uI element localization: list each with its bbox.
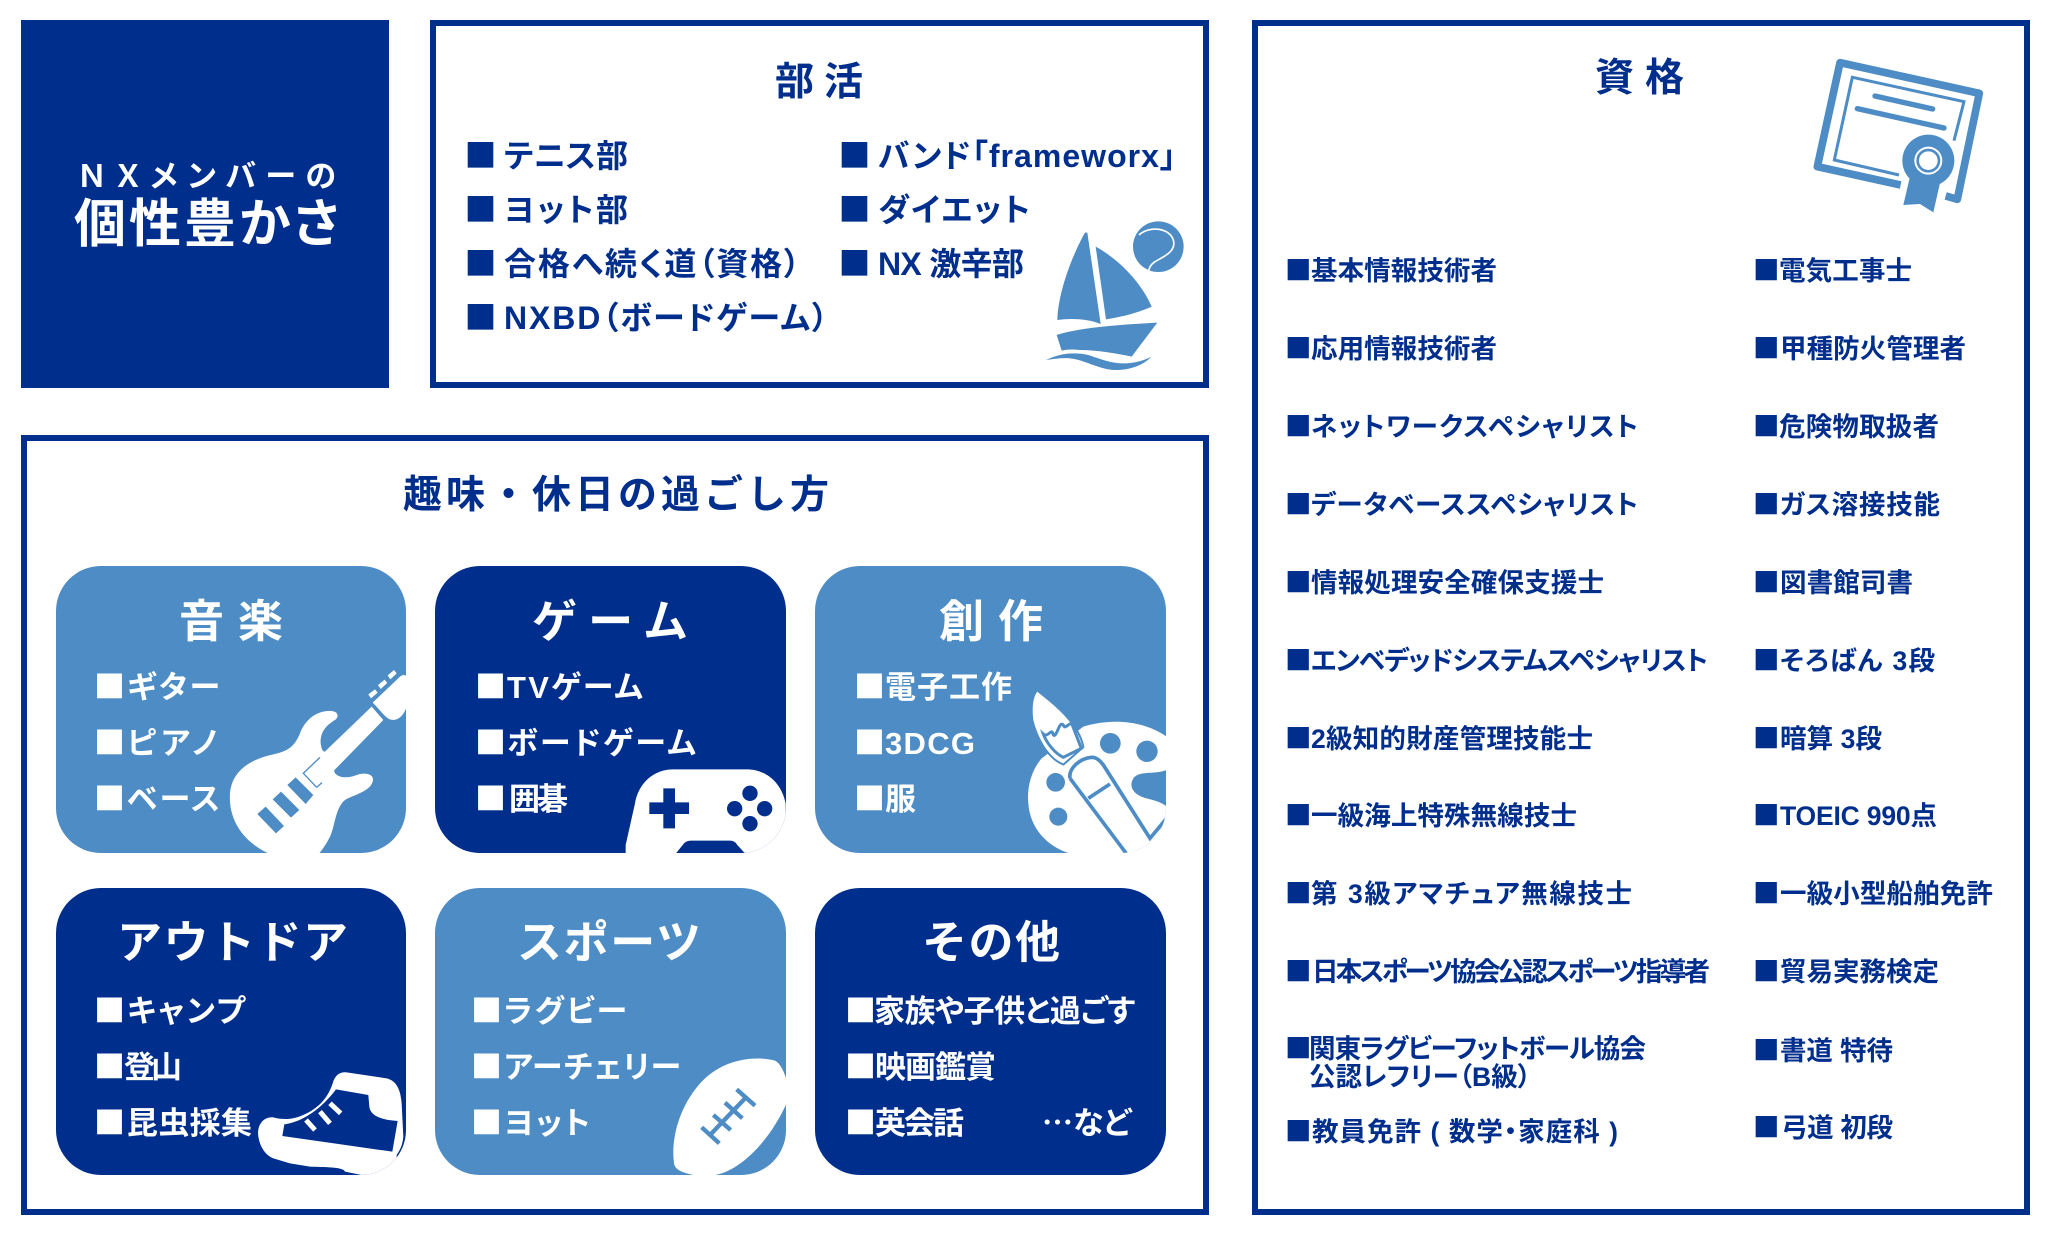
icon: sailboat and tennis ball [1046, 221, 1184, 370]
creation list: ■ [854, 774, 885, 819]
clubs list: ■ [464, 131, 497, 177]
qualifications list: left column: 一級海上特殊無線技士 [1311, 801, 1577, 831]
qualifications list: left column: ■ [1285, 1110, 1312, 1149]
clubs list: ■ [464, 185, 497, 231]
qualifications list: right column: 貿易実務検定 [1780, 957, 1939, 987]
games list: ■ [475, 718, 506, 763]
games list: ■ [475, 774, 506, 819]
other list [845, 986, 1135, 1143]
qualifications list: right column: ■ [1753, 717, 1780, 756]
creation list [854, 662, 1012, 819]
qualifications list: right column: ■ [1753, 1029, 1780, 1068]
clubs list: NX 激辛部 [878, 246, 1024, 282]
qualifications list: left column: ■ [1285, 483, 1312, 522]
qualifications list: left column: 情報処理安全確保支援士 [1311, 568, 1604, 598]
qualifications list: left column: ■ [1285, 405, 1312, 444]
music list: ■ [94, 662, 125, 707]
games heading: ゲーム [532, 596, 688, 647]
icon: palette and brush [1028, 692, 1167, 854]
clubs list: ■ [838, 185, 871, 231]
card: sports [435, 888, 787, 1175]
outdoors list: ■ [94, 986, 125, 1031]
music list: ■ [94, 718, 125, 763]
panel: qualifications [1255, 23, 2027, 1212]
qualifications list: left column: ■ [1285, 1027, 1312, 1066]
qualifications list: left column: 第 3級アマチュア無線技士 [1311, 879, 1632, 909]
hobbies heading: 趣味・休日の過ごし方 [403, 474, 829, 517]
qualifications list: right column: 危険物取扱者 [1779, 412, 1939, 442]
sports heading: スポーツ [517, 917, 701, 968]
games list: ■ [475, 662, 506, 707]
qualifications list: right column: 弓道 初段 [1781, 1113, 1894, 1143]
outdoors list: 登山 [124, 1050, 182, 1085]
card: creation [815, 566, 1167, 854]
games list: 囲碁 [509, 782, 568, 817]
other heading: その他 [922, 917, 1060, 968]
qualifications list: left column: 教員免許 ( 数学・家庭科 ) [1312, 1117, 1618, 1147]
qualifications list: left column: 日本スポーツ協会公認スポーツ指導者 [1312, 957, 1710, 987]
qualifications heading: 資格 [1595, 57, 1684, 100]
title: first line: ＮＸメンバーの [78, 159, 336, 194]
outdoors list [94, 986, 252, 1143]
qualifications list: right column: ■ [1753, 405, 1780, 444]
clubs heading: 部活 [775, 61, 863, 104]
sports list [471, 986, 681, 1143]
music heading: 音楽 [179, 596, 283, 647]
sports list: ■ [471, 1098, 502, 1143]
creation list: 服 [885, 782, 916, 817]
sports list: ■ [471, 986, 502, 1031]
other list: ■ [845, 1042, 876, 1087]
creation heading: 創作 [939, 596, 1043, 647]
qualifications list: right column: ■ [1753, 1106, 1780, 1145]
clubs list: バンド「frameworx」 [878, 138, 1176, 174]
creation list: ■ [854, 718, 885, 763]
icon: rugby ball [673, 1058, 787, 1175]
clubs list: NXBD（ボードゲーム） [504, 300, 828, 336]
qualifications list: right column: ■ [1753, 561, 1780, 600]
icon: game controller [626, 769, 787, 853]
games list [475, 662, 696, 819]
sports list: ラグビー [504, 994, 627, 1029]
qualifications list: left column: ■ [1285, 561, 1312, 600]
music list: ギター [127, 670, 220, 705]
qualifications list: left column: 公認レフリー（B級） [1309, 1062, 1531, 1092]
qualifications list: right column: ■ [1753, 327, 1780, 366]
qualifications list: right column [1753, 249, 1993, 1145]
qualifications list: right column: ■ [1753, 639, 1780, 678]
other list: 映画鑑賞 [875, 1050, 996, 1085]
creation list: 電子工作 [885, 670, 1012, 705]
qualifications list: left column: ■ [1285, 639, 1312, 678]
qualifications list: left column: ■ [1285, 950, 1312, 989]
icon: boot [258, 1072, 403, 1175]
qualifications list: right column: ■ [1753, 950, 1780, 989]
panel: hobbies and holidays [24, 438, 1206, 1212]
icon: guitar [230, 670, 407, 853]
qualifications list: right column: ■ [1753, 794, 1780, 833]
qualifications list: left column: ■ [1285, 249, 1312, 288]
qualifications list: left column: ■ [1285, 794, 1312, 833]
qualifications list: left column: データベーススペシャリスト [1311, 490, 1638, 520]
other list: …など [1042, 1098, 1133, 1143]
music list: ベース [127, 782, 220, 817]
qualifications list: right column: 暗算 3段 [1780, 724, 1882, 754]
games list: ボードゲーム [507, 726, 696, 761]
qualifications list: right column: 図書館司書 [1780, 568, 1913, 598]
clubs list: ■ [838, 131, 871, 177]
card: other [815, 888, 1166, 1175]
qualifications list: left column: 基本情報技術者 [1311, 256, 1497, 286]
other list: 英会話 [875, 1106, 964, 1141]
outdoors list: ■ [94, 1042, 125, 1087]
title block [21, 20, 389, 388]
outdoors list: ■ [94, 1098, 125, 1143]
qualifications list: left column: ■ [1285, 327, 1312, 366]
sports list: ヨット [504, 1106, 590, 1141]
music list: ピアノ [127, 726, 217, 761]
qualifications list: left column: ■ [1285, 872, 1312, 911]
qualifications list: left column: エンベデッドシステムスペシャリスト [1311, 646, 1708, 676]
qualifications list: right column: TOEIC 990点 [1780, 801, 1937, 831]
qualifications list: left column: ■ [1285, 717, 1312, 756]
other list: ■ [845, 1098, 876, 1143]
qualifications list: left column: 関東ラグビーフットボール協会 [1309, 1034, 1646, 1064]
icon: certificate [1817, 63, 1979, 212]
qualifications list: right column: ■ [1753, 483, 1780, 522]
panel: clubs [433, 23, 1206, 385]
clubs list: ■ [464, 293, 497, 339]
music list: ■ [94, 774, 125, 819]
qualifications list: right column: 甲種防火管理者 [1780, 334, 1966, 364]
other list: ■ [845, 986, 876, 1031]
other list: 家族や子供と過ごす [874, 994, 1135, 1029]
qualifications list: right column: ■ [1753, 872, 1780, 911]
card: outdoors [56, 888, 406, 1175]
clubs list: ■ [464, 239, 497, 285]
games list: TVゲーム [507, 670, 643, 705]
clubs list: ヨット部 [504, 192, 628, 228]
outdoors list: キャンプ [127, 994, 246, 1029]
qualifications list: left column: 応用情報技術者 [1311, 334, 1497, 364]
outdoors list: 昆虫採集 [127, 1106, 252, 1141]
card: games [435, 566, 787, 853]
card: music [56, 566, 407, 853]
clubs list: ダイエット [878, 192, 1030, 228]
qualifications list: left column [1285, 249, 1710, 1149]
clubs list [464, 131, 1176, 339]
qualifications list: right column: ■ [1753, 249, 1780, 288]
qualifications list: left column: ネットワークスペシャリスト [1311, 412, 1638, 442]
clubs list: テニス部 [504, 138, 628, 174]
creation list: ■ [854, 662, 885, 707]
qualifications list: right column: そろばん 3段 [1780, 646, 1936, 676]
clubs list: 合格へ続く道（資格） [504, 246, 800, 282]
outdoors heading: アウトドア [117, 917, 348, 968]
title: second line: 個性豊かさ [74, 196, 339, 254]
qualifications list: left column: 2級知的財産管理技能士 [1311, 724, 1593, 754]
qualifications list: right column: ガス溶接技能 [1780, 490, 1940, 520]
qualifications list: right column: 書道 特待 [1780, 1036, 1893, 1066]
qualifications list: right column: 一級小型船舶免許 [1780, 879, 1993, 909]
clubs list: ■ [838, 239, 871, 285]
sports list: アーチェリー [504, 1050, 681, 1085]
qualifications list: right column: 電気工事士 [1779, 256, 1912, 286]
sports list: ■ [471, 1042, 502, 1087]
creation list: 3DCG [885, 726, 975, 761]
music list [94, 662, 220, 819]
